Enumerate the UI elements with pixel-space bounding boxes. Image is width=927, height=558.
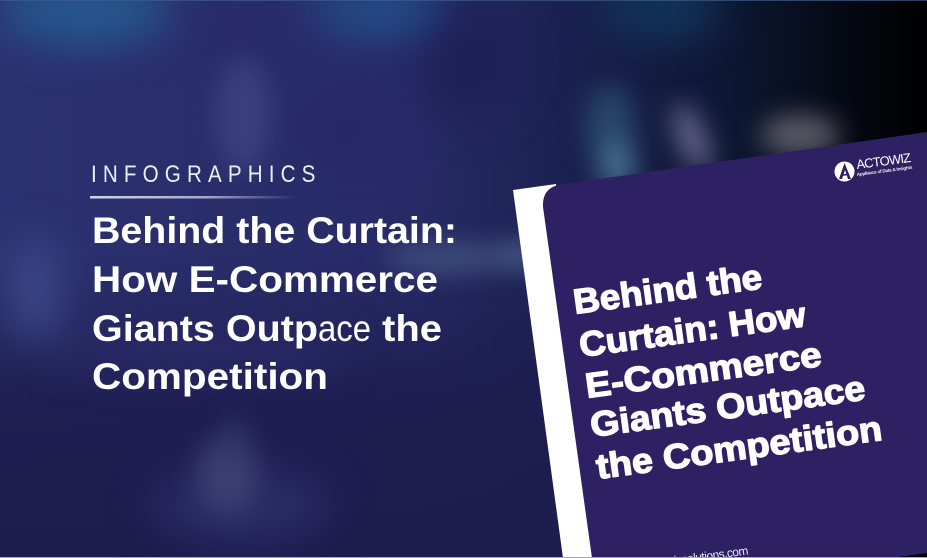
bottom edge line — [0, 557, 927, 558]
cover: logo: Appliance of Data & Insights — [856, 165, 913, 177]
main title — [92, 210, 457, 397]
cover: title: Giants Outpace — [588, 369, 868, 445]
cover: title: Behind the — [571, 258, 764, 322]
main title: How E-Commerce — [92, 259, 438, 300]
cover: title: E-Commerce — [583, 335, 824, 406]
main title: Giants Outp — [92, 308, 318, 349]
cover: logo — [834, 150, 913, 182]
report cover mockup — [513, 132, 927, 558]
cover: white page spine — [513, 184, 600, 558]
cover: title: the Competition — [594, 409, 884, 487]
cover: corner wedge — [898, 553, 927, 557]
main title: ace — [318, 308, 371, 349]
cover: title: Curtain: How — [577, 295, 809, 365]
main title: Competition — [92, 356, 328, 397]
top edge highlight — [0, 0, 927, 1]
divider under eyebrow — [90, 196, 296, 198]
main title: Behind the Curtain: — [92, 210, 457, 251]
eyebrow label: INFOGRAPHICS: INFOGRAPHICS — [91, 161, 315, 187]
cover: title — [571, 258, 884, 487]
cover: logo: ACTOWIZ — [855, 150, 912, 172]
cover: purple panel — [543, 132, 927, 558]
main title: the — [382, 308, 442, 349]
